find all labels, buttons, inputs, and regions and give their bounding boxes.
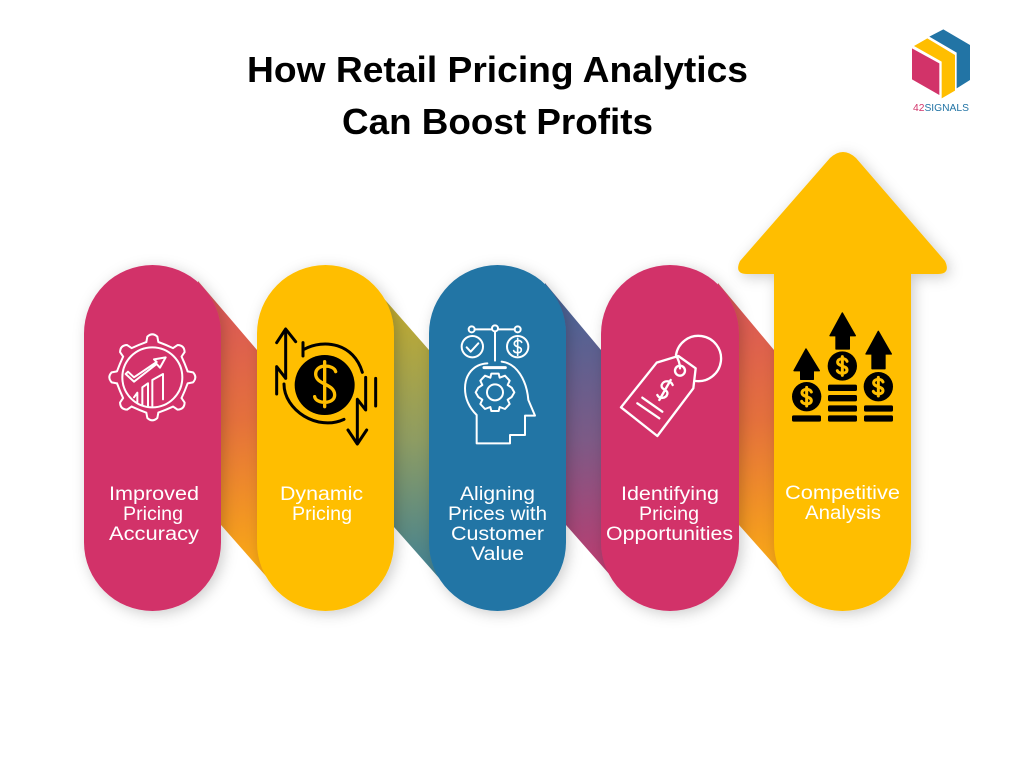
label: Improved (109, 484, 199, 505)
panel: dynamic pricing (257, 265, 394, 611)
icon: head with gear and balance (462, 325, 535, 443)
logo: 42signals (912, 29, 970, 114)
panel: improved pricing accuracy (84, 265, 221, 611)
label: Value (471, 544, 524, 565)
label: Customer (451, 524, 545, 545)
panel: competitive analysis arrow (738, 152, 947, 611)
label: Pricing (292, 504, 352, 525)
label (280, 484, 363, 525)
label (606, 484, 733, 545)
connector: yellow to blue (350, 285, 447, 587)
title: Can Boost Profits (342, 101, 653, 142)
icon: gear with growth chart (107, 332, 197, 422)
label (785, 483, 900, 524)
icon: rising coin stacks (792, 313, 893, 422)
label: Dynamic (280, 484, 363, 505)
title (247, 49, 748, 142)
connector: blue to pink (525, 283, 625, 592)
label: Accuracy (109, 524, 200, 545)
label: Pricing (639, 504, 699, 525)
label (109, 484, 200, 545)
label: Analysis (805, 503, 881, 524)
label: Competitive (785, 483, 900, 504)
icon: price tag (621, 336, 721, 436)
label: Aligning (460, 484, 535, 505)
connector: pink to arrow (700, 283, 795, 588)
connector: pink to yellow (180, 281, 280, 592)
panel: identifying pricing opportunities (601, 265, 739, 611)
label: Identifying (621, 484, 719, 505)
label: Prices with (448, 504, 547, 525)
label (448, 484, 547, 565)
label: Opportunities (606, 524, 733, 545)
logo: 42signals: 42SIGNALS (913, 102, 969, 114)
title: How Retail Pricing Analytics (247, 49, 748, 90)
panel: aligning prices with customer value (429, 265, 566, 611)
label: Pricing (123, 504, 183, 525)
icon: dollar with up and down arrows (277, 329, 376, 444)
